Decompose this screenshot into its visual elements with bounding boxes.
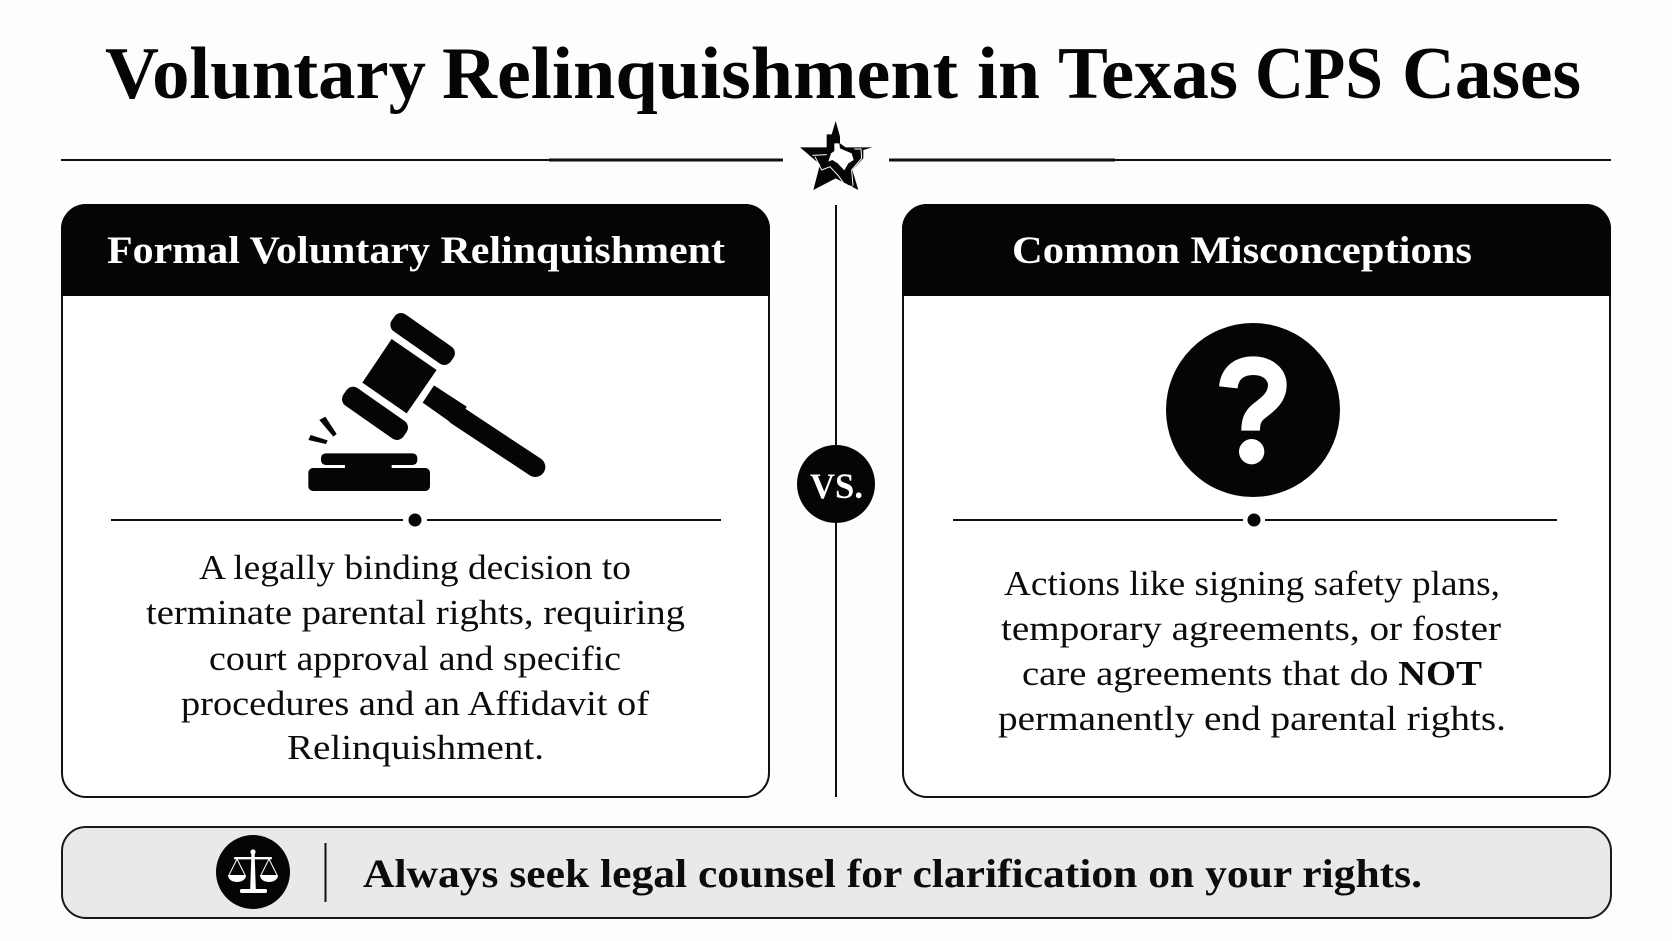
panel body text: Actions like signing safety plans, <box>1004 565 1500 603</box>
title <box>105 33 1581 115</box>
callout: legal counsel <box>62 827 1611 918</box>
panel heading: Common Misconceptions <box>1012 229 1472 272</box>
title divider with star emblem <box>61 121 1611 190</box>
center vertical divider with VS badge <box>797 205 875 797</box>
panel: formal voluntary relinquishment <box>61 204 770 797</box>
icon: question mark <box>1166 323 1340 497</box>
title: Cases <box>1402 33 1581 115</box>
panel body text: permanently end parental rights. <box>998 700 1506 738</box>
panel: common misconceptions <box>902 204 1611 797</box>
title: CPS <box>1255 33 1383 115</box>
icon: gavel <box>308 310 535 491</box>
panel heading: Formal Voluntary Relinquishment <box>107 229 725 272</box>
panel body text <box>998 565 1506 738</box>
title: Voluntary <box>105 33 426 115</box>
center vertical divider with VS badge: VS. <box>810 466 863 506</box>
title: Relinquishment <box>442 33 958 115</box>
panel body text: care agreements that do NOT <box>1022 655 1482 693</box>
panel body text: terminate parental rights, requiring <box>146 594 685 632</box>
panel divider <box>111 514 721 526</box>
panel divider <box>953 514 1557 526</box>
panel body text <box>146 549 685 767</box>
panel body text: A legally binding decision to <box>199 549 631 587</box>
callout text: Always seek legal counsel for clarification on your rights. <box>363 851 1422 896</box>
panel header <box>902 204 1611 296</box>
icon: Texas star <box>800 121 872 190</box>
panel header <box>61 204 770 296</box>
icon: scales of justice <box>216 835 290 909</box>
panel body text: Relinquishment. <box>287 729 544 767</box>
panel body text: temporary agreements, or foster <box>1001 610 1502 648</box>
title: Texas <box>1058 33 1238 115</box>
panel body text: procedures and an Affidavit of <box>181 685 650 723</box>
title: in <box>977 33 1040 115</box>
panel body text: court approval and specific <box>209 640 621 678</box>
